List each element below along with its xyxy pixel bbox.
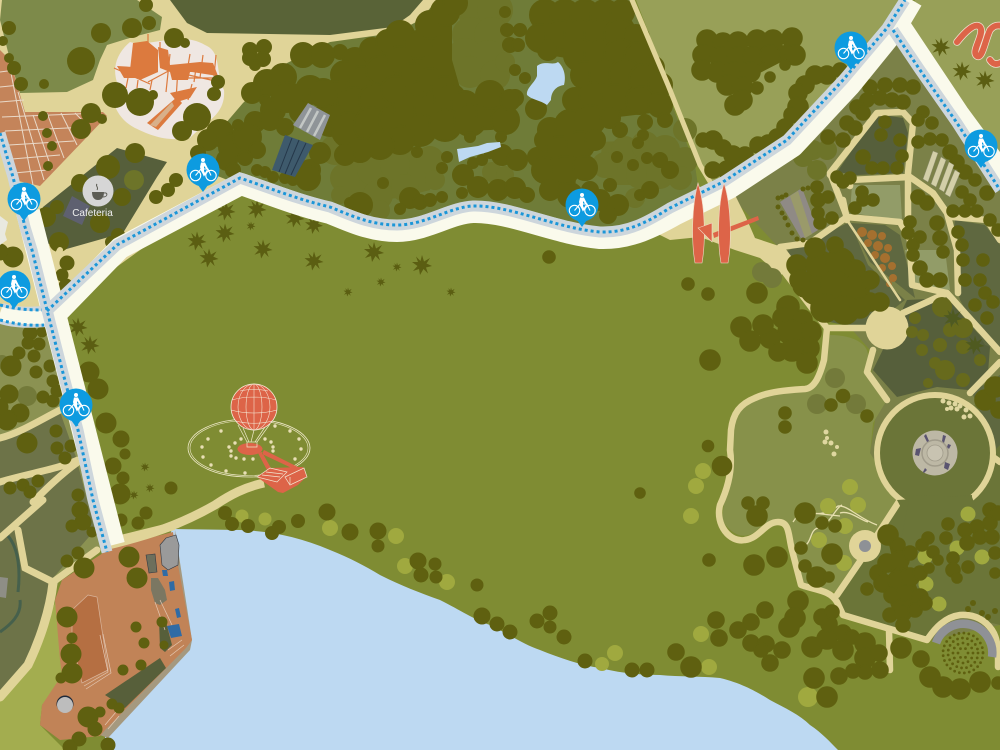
cafeteria garden cell bbox=[40, 148, 167, 250]
forest dark trees bbox=[191, 0, 678, 223]
red squiggle sculpture bbox=[957, 25, 1000, 64]
tree mass base: north-east group bbox=[712, 45, 788, 92]
garden cell: far east dark bbox=[972, 375, 1000, 452]
forest floor bbox=[190, 0, 700, 240]
north-west trees bbox=[0, 0, 183, 252]
dock: paved terrace bbox=[40, 532, 192, 740]
garden cell: tree cell bbox=[785, 222, 905, 328]
forest dark mass: centre bbox=[338, 10, 510, 148]
cycle lane dots bbox=[0, 0, 1000, 552]
dock: small buildings and blue roofs bbox=[146, 554, 182, 638]
circular lawn with ring path bbox=[874, 392, 996, 545]
lawn: north-west bbox=[0, 0, 162, 93]
twin spindle sculpture bbox=[693, 183, 759, 263]
playground ground bbox=[113, 39, 224, 139]
cafeteria icon and label: Cafeteria bbox=[72, 208, 113, 219]
cafeteria building bbox=[63, 196, 90, 225]
lime trees bbox=[236, 463, 990, 707]
lawn: central garden bbox=[722, 335, 900, 592]
garden lower zone bbox=[837, 400, 1000, 640]
tree mass base: tree cell bbox=[808, 262, 862, 315]
wavy garden walks bbox=[793, 505, 877, 545]
small grey building, west bbox=[0, 577, 8, 598]
garden path network bbox=[632, 0, 1000, 670]
main cycle road: white carriageway bbox=[50, 0, 912, 320]
playground trees bbox=[102, 28, 225, 141]
main tree groups, east bbox=[543, 28, 1000, 707]
path to balloon bbox=[104, 483, 264, 546]
pavilion: grey roof bbox=[293, 103, 330, 140]
cycle marker: central road bbox=[566, 188, 598, 227]
paved beige zone, north-west bbox=[0, 0, 440, 315]
cafeteria icon and label bbox=[72, 176, 114, 219]
garden cell: dark with trees bbox=[873, 298, 990, 397]
garden walls: curved dark bands bbox=[0, 536, 20, 632]
balloon attraction bbox=[188, 384, 310, 493]
lawn: far north-east bbox=[905, 0, 1000, 170]
cycle marker: west branch bbox=[0, 270, 30, 309]
cycle marker: north-east road bbox=[834, 32, 868, 70]
forest dark mass: east bbox=[540, 5, 660, 195]
garden cell: mulch bbox=[850, 223, 915, 298]
forest lighter trees bbox=[320, 0, 837, 220]
small roundabout bbox=[849, 530, 881, 562]
west and shore trees bbox=[0, 244, 654, 750]
cycle marker: east road bbox=[964, 130, 998, 168]
cycle lane bands bbox=[0, 0, 1000, 552]
west lawn paths bbox=[0, 250, 97, 697]
concentric planting bbox=[943, 633, 983, 673]
garden cell: pale bbox=[850, 185, 902, 220]
tree: lighter in cafeteria garden bbox=[124, 170, 144, 190]
garden lighter trees bbox=[0, 262, 866, 414]
dock: round grey building bbox=[56, 696, 74, 713]
cycle marker: forest west bbox=[186, 154, 220, 192]
dark lawn: north bbox=[170, 0, 423, 35]
garden base bbox=[730, 35, 1000, 640]
dock: grey building bbox=[160, 535, 179, 570]
dock: amphitheatre bbox=[72, 595, 111, 689]
pond: small bbox=[457, 142, 501, 162]
cream stepping stones bbox=[822, 398, 972, 456]
west branch road bbox=[0, 313, 50, 318]
paved link beside dock bbox=[100, 522, 175, 548]
forest lighter mass: south-west bbox=[342, 148, 432, 203]
pavilion: blue roof bbox=[272, 135, 313, 177]
dock: green beds bbox=[105, 618, 172, 708]
pond: large bbox=[527, 62, 565, 105]
white tower, west edge bbox=[0, 216, 8, 245]
garden cell: pale east bbox=[905, 250, 950, 290]
trees on dark cell bbox=[906, 297, 993, 388]
east road: white carriageway bbox=[900, 22, 1000, 180]
cycle marker: plaza bbox=[8, 182, 40, 221]
garden cell: dark north bbox=[837, 115, 908, 175]
west lawn cells bbox=[0, 318, 105, 750]
garden cell: lavender beds bbox=[780, 188, 818, 240]
playground structure bbox=[114, 34, 220, 130]
garden cell: pale south bbox=[912, 222, 955, 295]
lake bbox=[105, 529, 838, 750]
dock: sea wall bbox=[100, 530, 192, 738]
small planting dots bbox=[776, 186, 998, 620]
garden cell: east dark bbox=[950, 220, 1000, 350]
plaza: tiled area bbox=[0, 50, 107, 186]
west road: white carriageway bbox=[28, 212, 113, 545]
stone circle bbox=[912, 430, 958, 476]
grey arc path bbox=[936, 624, 992, 657]
sculpture plaza, beige bbox=[650, 195, 800, 275]
tree mass base: south garden bbox=[886, 540, 918, 612]
forest lighter mass: south-east bbox=[600, 138, 685, 185]
dock: terrace steps bbox=[105, 600, 184, 729]
lawn: north-east bbox=[636, 0, 905, 190]
cycle marker: west road bbox=[60, 388, 92, 427]
path hub bbox=[866, 306, 908, 350]
plants: spiky stars bbox=[68, 38, 994, 500]
mulch clumps bbox=[857, 227, 897, 287]
grey strip buildings bbox=[923, 151, 960, 197]
